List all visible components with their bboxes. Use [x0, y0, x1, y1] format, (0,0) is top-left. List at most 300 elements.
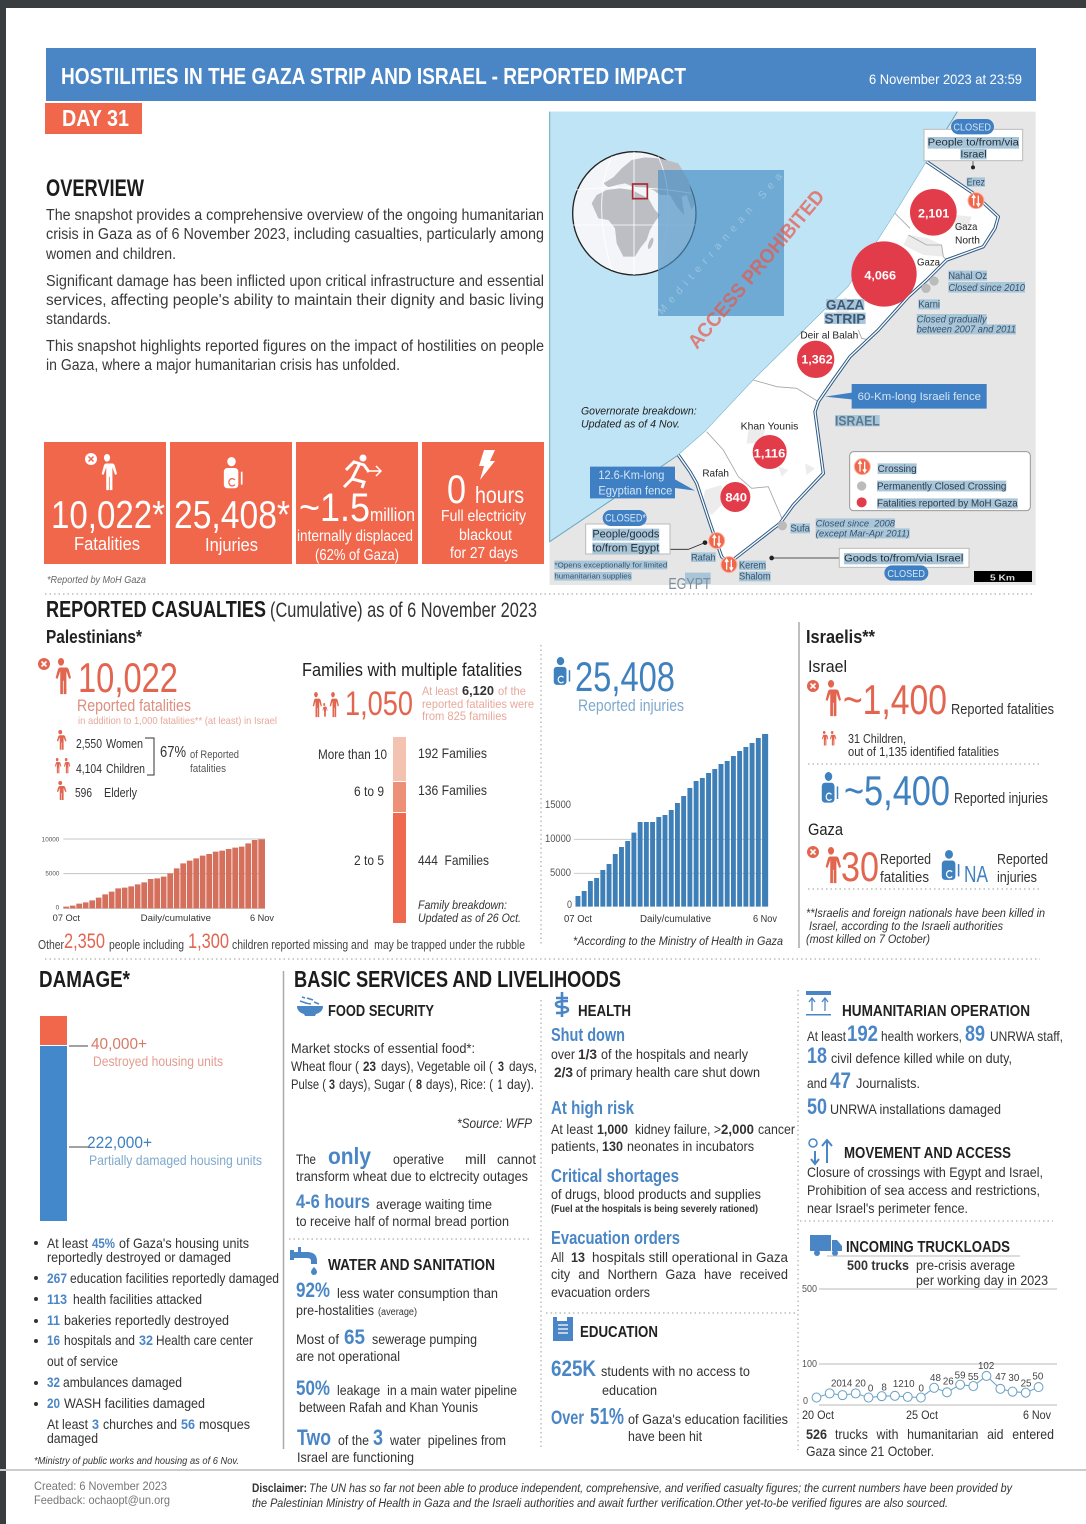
Israelis panel	[806, 627, 1054, 946]
Palestinians heading: Palestinians*	[46, 627, 142, 647]
family breakdown bar: Updated as of 26 Oct.	[418, 911, 521, 925]
Israel children	[822, 731, 999, 759]
panel: humanitarian operation: and	[807, 1075, 827, 1091]
panel: water and sanitation: of the	[338, 1432, 369, 1448]
panel: food security: 1	[498, 1076, 502, 1092]
panel: water and sanitation: water pipelines from	[389, 1432, 506, 1448]
urban areas	[702, 215, 972, 515]
KPI: fatalities: Fatalities	[74, 534, 140, 554]
panel: education: Over	[551, 1408, 584, 1429]
panel: health: kidney failure, >	[635, 1121, 721, 1137]
footer: Created: 6 November 2023	[34, 1479, 167, 1493]
icon: humanitarian operation	[806, 991, 831, 1016]
fatalities by group: of Reported	[190, 749, 239, 761]
fatality circles: 1,362	[801, 353, 833, 367]
chart: trucks per day: 12	[893, 1379, 904, 1390]
callout: Erez crossing: People to/from/via	[928, 137, 1019, 148]
overview text: The snapshot provides a comprehensive overview of the ongoing humanitarian	[46, 207, 544, 224]
panel: health: 130	[602, 1138, 623, 1154]
damage list: reportedly destroyed or damaged	[47, 1249, 231, 1265]
Israel fatalities: ~1,400	[843, 676, 947, 723]
title banner	[46, 48, 1036, 101]
Gaza injuries: Reported	[997, 852, 1048, 868]
place labels	[702, 222, 980, 479]
damage list: 113	[47, 1291, 67, 1307]
families figure: of the	[498, 684, 526, 698]
panel: food security: 23	[363, 1058, 376, 1074]
panel: water and sanitation: Israel are functioning	[297, 1449, 414, 1465]
family breakdown bar: 136 Families	[418, 782, 487, 798]
damage list: Health care center	[156, 1332, 253, 1348]
chart: trucks per day: 0	[803, 1395, 808, 1407]
crossing notes: Nahal Oz	[948, 271, 987, 282]
governorate note: Updated as of 4 Nov.	[581, 418, 680, 430]
families figure: reported fatalities were	[422, 697, 534, 711]
panel: water and sanitation: 65	[344, 1326, 365, 1349]
panel: health	[551, 992, 795, 1300]
chart: cumulative injuries: Daily/cumulative	[640, 914, 711, 925]
sea zone: Mediterranean Sea	[656, 171, 785, 317]
chart: cumulative fatalities: 0	[56, 904, 60, 911]
damage list: out of service	[47, 1353, 118, 1369]
chart: cumulative injuries: 15000	[545, 799, 571, 811]
damage list: 267	[47, 1270, 67, 1286]
fatalities by group: Women	[106, 736, 143, 751]
place labels: Khan Younis	[741, 421, 798, 432]
panel: health: cancer	[758, 1121, 795, 1137]
Palestinian injuries figure: 25,408	[575, 653, 675, 700]
panel: health: 1,000	[597, 1121, 628, 1137]
Palestinian injuries figure	[554, 653, 684, 715]
KPI: injuries: Injuries	[205, 535, 258, 555]
callout: Erez crossing: CLOSED	[953, 123, 991, 134]
Gaza fatalities: Reported	[880, 852, 931, 868]
chart: trucks per day: 30	[1008, 1373, 1020, 1384]
families heading: Families with multiple fatalities	[302, 660, 522, 680]
panel: food security: FOOD SECURITY	[328, 1003, 435, 1020]
damage list: education facilities reportedly damaged	[70, 1270, 279, 1286]
Gaza injuries	[942, 850, 1048, 887]
Egyptian fence callout	[590, 467, 695, 498]
chart: cumulative fatalities: 5000	[45, 871, 60, 878]
damage list: 11	[47, 1312, 60, 1328]
overview text: women and children.	[45, 246, 176, 263]
chart: trucks per day: 8	[881, 1382, 887, 1394]
panel: education: education	[602, 1382, 657, 1398]
missing people note: children reported missing and may be trapped under the rubble	[232, 938, 525, 952]
housing damage chart: Partially damaged housing units	[89, 1152, 262, 1168]
place labels: Gaza	[917, 258, 940, 269]
missing people note: 1,300	[188, 930, 229, 953]
panel: water and sanitation: 50%	[296, 1377, 330, 1400]
damage list: 56	[181, 1416, 195, 1432]
casualties heading: REPORTED CASUALTIES	[46, 596, 266, 622]
Israelis panel: Gaza	[808, 820, 843, 839]
families figure: 1,050	[345, 685, 413, 723]
Israelis footnote: **Israelis and foreign nationals have been killed in	[806, 906, 1045, 920]
chart: trucks per day: 0	[919, 1383, 924, 1394]
panel: education: of Gaza's education facilities	[628, 1411, 788, 1427]
panel: health: neonates in incubators	[627, 1138, 754, 1154]
panel: movement and access: near Israel's perimeter fence.	[807, 1200, 968, 1216]
region labels: EGYPT	[668, 576, 711, 593]
panel: humanitarian operation: Journalists.	[856, 1075, 920, 1091]
panel: humanitarian operation: UNRWA staff,	[990, 1028, 1063, 1044]
damage list: 32	[47, 1374, 60, 1390]
damage list: hospitals and	[64, 1332, 135, 1348]
callout: Rafah crossing	[586, 510, 707, 555]
panel: food security: days,	[509, 1058, 537, 1074]
chart: cumulative fatalities: Daily/cumulative	[141, 913, 211, 923]
KPI: electricity	[422, 442, 544, 564]
damage list: 32	[139, 1332, 153, 1348]
KPI: electricity: for 27 days	[450, 545, 518, 562]
panel: water and sanitation: WATER AND SANITATION	[328, 1257, 495, 1274]
panel: food security: transform wheat due to elctrecity outages	[296, 1168, 528, 1184]
Israelis footnote: Israel, according to the Israeli authorities	[809, 919, 1003, 933]
chart: cumulative fatalities: 6 Nov	[250, 913, 274, 923]
panel: health: Shut down	[551, 1025, 625, 1045]
Israel injuries: Reported injuries	[954, 791, 1048, 807]
panel: food security: Wheat flour (	[291, 1058, 359, 1074]
map legend: Permanently Closed Crossing	[877, 481, 1006, 492]
place labels: Deir al Balah	[800, 331, 859, 342]
damage list: bakeries reportedly destroyed	[64, 1312, 229, 1328]
overview text: Significant damage has been inflicted upon critical infrastructure and essential	[46, 273, 544, 290]
callout: Erez crossing	[924, 119, 1023, 169]
region labels: GAZA	[826, 296, 864, 312]
panel: food security: days), Vegetable oil (	[381, 1058, 493, 1074]
locator globe	[573, 152, 696, 275]
Palestinian fatalities figure: in addition to 1,000 fatalities** (at least) in Israel	[78, 715, 277, 727]
panel: humanitarian operation: HUMANITARIAN OPERATION	[842, 1003, 1030, 1020]
fatalities by group: 2,550	[76, 736, 102, 751]
chart: cumulative injuries: 5000	[550, 867, 571, 879]
Palestinian fatalities figure	[38, 654, 277, 727]
panel: health: At least	[551, 1121, 593, 1137]
chart: trucks per day: 20	[831, 1378, 842, 1389]
fatalities by group: Elderly	[104, 785, 137, 800]
panel: humanitarian operation: civil defence killed while on duty,	[831, 1050, 1012, 1066]
panel: incoming truckloads: per working day in 2023	[916, 1272, 1048, 1288]
damage list: 20	[47, 1395, 60, 1411]
Palestinian injuries figure: Reported injuries	[578, 697, 684, 715]
fatalities by group: fatalities	[190, 763, 226, 775]
panel: food security: only	[328, 1143, 371, 1169]
panel: incoming truckloads: 526	[806, 1426, 827, 1442]
Israelis footnote: (most killed on 7 October)	[806, 932, 930, 946]
crossing notes: Sufa	[790, 524, 811, 535]
panel: education: 625K	[551, 1356, 596, 1381]
damage list: health facilities attacked	[73, 1291, 202, 1307]
footer	[0, 1469, 1086, 1510]
Israel injuries: ~5,400	[844, 767, 950, 814]
panel: food security: average waiting time	[376, 1196, 492, 1212]
footer: Disclaimer:	[252, 1483, 307, 1495]
Israel fatalities	[807, 676, 1054, 723]
housing damage chart	[40, 1016, 262, 1221]
damage list: At least	[47, 1416, 88, 1432]
chart: cumulative injuries: 0	[567, 899, 572, 911]
map legend: Crossing	[878, 464, 917, 475]
chart: trucks per day: 20	[855, 1378, 866, 1389]
chart: trucks per day: 50	[1032, 1371, 1044, 1382]
panel: health: hospitals still operational in Gaza	[592, 1249, 788, 1265]
panel: water and sanitation: Most of	[296, 1331, 339, 1347]
chart: trucks per day: 102	[978, 1361, 995, 1372]
chart: trucks per day: 20 Oct	[802, 1408, 835, 1422]
damage heading: DAMAGE*	[39, 966, 130, 992]
panel: humanitarian operation: 89	[965, 1021, 985, 1046]
panel: water and sanitation: sewerage pumping	[372, 1331, 477, 1347]
KPI: injuries: 25,408*	[174, 494, 290, 537]
governorate borders	[707, 213, 947, 522]
damage list: churches and	[103, 1416, 177, 1432]
fatalities by group: 67%	[160, 744, 186, 761]
overview text: services, affecting people's ability to maintain their dignity and basic living	[46, 292, 544, 309]
families figure	[313, 683, 534, 723]
housing damage chart: 222,000+	[87, 1134, 152, 1152]
map legend: Fatalities reported by MoH Gaza	[877, 499, 1018, 510]
chart: trucks per day: 25	[1021, 1378, 1032, 1389]
damage list: of Gaza's housing units	[119, 1235, 249, 1251]
panel: food security: cannot	[497, 1151, 536, 1167]
overview text: This snapshot highlights reported figures on the impact of hostilities on people	[46, 338, 544, 355]
damage list: 3	[92, 1416, 99, 1432]
crossing notes: Kerem	[739, 561, 766, 572]
day badge	[45, 103, 142, 134]
chart: cumulative fatalities: 07 Oct	[53, 913, 80, 923]
Israelis footnote	[806, 906, 1045, 946]
crossing markers	[709, 193, 984, 573]
overview text: standards.	[46, 311, 111, 328]
KPI: displaced: million	[370, 505, 415, 525]
chart: trucks per day: 14	[841, 1378, 853, 1389]
region labels: ISRAEL	[835, 413, 880, 429]
chart: trucks per day: 55	[968, 1372, 979, 1383]
chart: trucks per day: 6 Nov	[1023, 1408, 1051, 1422]
Gaza fatalities: 30	[841, 843, 879, 890]
panel: health: over	[551, 1046, 575, 1062]
panel: health: 13	[571, 1249, 585, 1265]
panel: education: EDUCATION	[580, 1324, 658, 1341]
panel: food security: mill	[465, 1151, 486, 1167]
icon: tap	[290, 1247, 317, 1275]
KPI: injuries	[170, 442, 292, 564]
place labels: Gaza	[955, 222, 978, 233]
panel: water and sanitation: (average)	[378, 1307, 417, 1318]
fatality circles	[720, 189, 957, 512]
panel: food security: *Source: WFP	[457, 1116, 532, 1131]
scale bar: 5 Km	[990, 572, 1015, 582]
panel: incoming truckloads: Gaza since 21 October.	[806, 1443, 934, 1459]
chart: trucks per day: 10	[904, 1379, 915, 1390]
Israelis panel: Israelis**	[806, 627, 875, 647]
panel: water and sanitation: leakage in a main water pipeline	[337, 1382, 517, 1398]
families figure: from 825 families	[422, 709, 507, 723]
KPI: electricity: 0	[447, 468, 466, 512]
panel: movement and access: Prohibition of sea access and restrictions,	[807, 1182, 1040, 1198]
fence	[678, 162, 998, 564]
crossing notes: *Opens exceptionally for limited	[554, 561, 667, 570]
panel: food security: The	[296, 1151, 316, 1167]
panel: humanitarian operation: 192	[847, 1021, 878, 1046]
map	[550, 112, 1036, 593]
fatalities by group: 596	[75, 785, 92, 800]
panel: water and sanitation: less water consumption than	[337, 1285, 498, 1301]
panel: food security: Market stocks of essential food*:	[291, 1040, 475, 1056]
footer: Feedback: ochaopt@un.org	[34, 1493, 170, 1507]
casualties heading	[46, 596, 537, 622]
panel: humanitarian operation: 47	[830, 1068, 851, 1093]
access prohibited: ACCESS PROHIBITED	[684, 186, 829, 353]
panel: food security: Pulse (	[291, 1076, 326, 1092]
callout: Kerem Shalom crossing: CLOSED	[887, 569, 925, 580]
place labels: Rafah	[702, 468, 729, 479]
panel: health: of drugs, blood products and supplies	[551, 1186, 761, 1202]
chart: cumulative injuries: 6 Nov	[753, 914, 777, 925]
chart: trucks per day: 25 Oct	[906, 1408, 939, 1422]
overview text: crisis in Gaza as of 6 November 2023, including casualties, particularly among	[46, 226, 544, 243]
crossing notes: humanitarian supplies	[554, 572, 632, 581]
chart: trucks per day	[802, 1283, 1057, 1422]
chart: trucks per day: 0	[868, 1383, 874, 1394]
Ministry of Health note: *According to the Ministry of Health in Gaza	[573, 934, 783, 948]
families figure: 6,120	[462, 683, 494, 698]
missing people note: Other	[38, 938, 64, 952]
basic services heading: BASIC SERVICES AND LIVELIHOODS	[294, 966, 621, 992]
chart: cumulative fatalities: 10000	[42, 837, 60, 844]
panel: education: have been hit	[628, 1428, 702, 1444]
crossing notes	[554, 177, 1026, 583]
Gaza fatalities	[807, 843, 931, 890]
panel: incoming truckloads	[802, 1235, 1057, 1459]
KPI: displaced	[296, 442, 418, 564]
fatalities by group: 4,104	[76, 761, 102, 776]
crossing notes: Rafah	[691, 552, 716, 562]
callout: Rafah crossing: to/from Egypt	[592, 543, 659, 555]
chart: trucks per day: 100	[802, 1358, 817, 1370]
Gaza injuries: injuries	[997, 870, 1037, 886]
panel: water and sanitation: pre-hostalities	[296, 1302, 374, 1318]
region labels	[668, 296, 880, 593]
panel: humanitarian operation: UNRWA installations damaged	[830, 1101, 1001, 1117]
KPI: electricity: hours	[475, 482, 524, 508]
chart: trucks per day: 47	[995, 1372, 1007, 1383]
family breakdown bar: 444 Families	[418, 852, 489, 868]
panel: humanitarian operation	[806, 991, 1063, 1119]
panel: health: At high risk	[551, 1098, 635, 1118]
fatalities by group: Children	[106, 761, 145, 776]
panel: food security: to receive half of normal bread portion	[296, 1213, 509, 1229]
panel: humanitarian operation: At least	[807, 1028, 846, 1044]
panel: health: of the hospitals and nearly	[601, 1046, 748, 1062]
callout: Kerem Shalom crossing	[769, 548, 969, 581]
panel: food security	[291, 997, 537, 1229]
chart: trucks per day: 59	[955, 1370, 966, 1381]
callout: Rafah crossing: CLOSED*	[605, 513, 647, 525]
panel: health: of primary health care shut down	[576, 1064, 760, 1080]
Israel children: out of 1,135 identified fatalities	[848, 745, 999, 759]
Israel fatalities: Reported fatalities	[951, 701, 1054, 718]
missing people note: 2,350	[64, 930, 105, 953]
fatality circles: 840	[725, 491, 747, 505]
panel: food security: operative	[393, 1151, 444, 1167]
panel: water and sanitation: are not operational	[296, 1348, 400, 1364]
family breakdown bar: 192 Families	[418, 745, 487, 761]
icon: movement	[809, 1139, 832, 1164]
panel: food security: 3	[329, 1076, 335, 1092]
gaza strip land	[678, 162, 998, 564]
Egyptian fence callout: Egyptian fence	[598, 485, 672, 498]
panel: humanitarian operation: health workers,	[881, 1028, 962, 1044]
panel: health: evacuation orders	[551, 1284, 650, 1300]
title banner: HOSTILITIES IN THE GAZA STRIP AND ISRAEL - REPORTED IMPACT	[61, 63, 686, 89]
KPI footnote: *Reported by MoH Gaza	[47, 575, 146, 586]
governorate note: Governorate breakdown:	[581, 405, 697, 417]
panel: movement and access: Closure of crossings with Egypt and Israel,	[807, 1164, 1043, 1180]
fatality circles: 2,101	[918, 207, 950, 221]
chart: trucks per day: 500	[802, 1283, 817, 1295]
housing damage chart: Destroyed housing units	[93, 1053, 223, 1069]
chart: cumulative injuries: 10000	[545, 833, 571, 845]
icon: food bowl	[297, 997, 323, 1016]
missing people note	[38, 930, 525, 953]
Egyptian fence callout: 12.6-Km-long	[598, 469, 664, 482]
panel: food security: 3	[498, 1058, 504, 1074]
chart: cumulative injuries: 07 Oct	[564, 914, 592, 925]
panel: water and sanitation: 3	[373, 1425, 383, 1450]
Gaza fatalities: fatalities	[880, 870, 929, 886]
panel: health: Critical shortages	[551, 1166, 679, 1186]
fatality circles: 1,116	[754, 447, 786, 461]
Israel children: 31 Children,	[848, 732, 906, 746]
panel: education: 51%	[590, 1403, 624, 1429]
panel: humanitarian operation: 50	[807, 1094, 827, 1119]
panel: food security: 8	[416, 1076, 422, 1092]
overview text	[45, 175, 544, 374]
region labels: STRIP	[824, 310, 866, 326]
KPI: electricity: blackout	[459, 527, 512, 544]
KPI: electricity: Full electricity	[441, 508, 526, 525]
crossing notes: Closed since 2010	[948, 283, 1026, 294]
panel: water and sanitation: between Rafah and Khan Younis	[299, 1399, 478, 1415]
KPI: fatalities: 10,022*	[51, 494, 165, 537]
chart: cumulative fatalities	[42, 837, 274, 923]
family breakdown bar: 2 to 5	[354, 852, 384, 868]
Palestinian fatalities figure: Reported fatalities	[77, 697, 191, 715]
fatality circles: 4,066	[864, 269, 896, 283]
panel: health: 2/3	[554, 1064, 573, 1080]
panel: movement and access	[807, 1139, 1043, 1216]
chart: cumulative injuries	[545, 734, 777, 925]
damage list: ambulances damaged	[63, 1374, 182, 1390]
panel: incoming truckloads: 500 trucks	[847, 1258, 909, 1273]
panel: incoming truckloads: INCOMING TRUCKLOADS	[846, 1239, 1010, 1256]
panel: water and sanitation: 92%	[296, 1279, 330, 1302]
map legend	[850, 452, 1030, 511]
crossing notes: Closed since 2008	[816, 518, 895, 528]
panel: food security: days), Sugar (	[339, 1076, 412, 1092]
damage list: damaged	[47, 1430, 98, 1446]
panel: education: students with no access to	[601, 1363, 750, 1379]
governorate note	[581, 405, 697, 430]
damage list	[34, 1235, 279, 1446]
missing people note: people including	[109, 938, 184, 952]
family breakdown bar: More than 10	[318, 746, 387, 762]
panel: water and sanitation: Two	[297, 1425, 331, 1450]
overview text: OVERVIEW	[46, 175, 144, 202]
